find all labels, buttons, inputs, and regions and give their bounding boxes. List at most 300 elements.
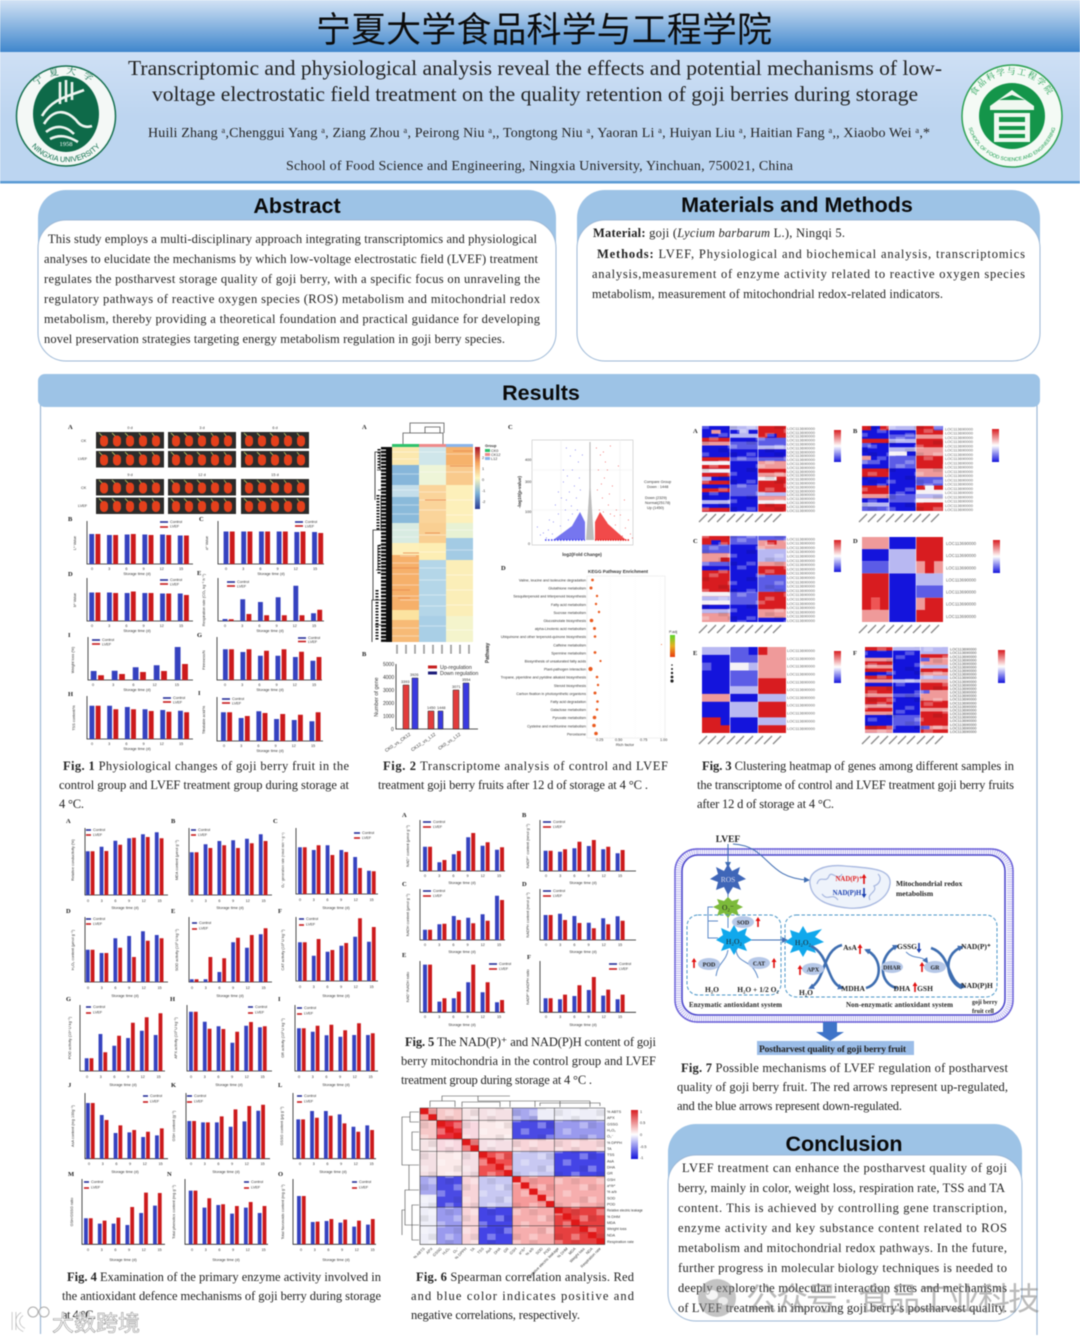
chart M: GSH/GSSG: 0 3 6 9 12 15 <box>87 1248 162 1252</box>
chart: respiration rate: Control <box>237 580 249 584</box>
KEGG pathway enrichment dot plot: Galactose metabolism <box>550 708 586 712</box>
correlation matrix: Weight loss <box>607 1227 627 1231</box>
heatmap E: E <box>693 650 697 657</box>
correlation matrix: TA <box>607 1147 612 1151</box>
heatmap B: LOC113690000 <box>945 443 974 448</box>
correlation matrix: MDA <box>568 1247 577 1256</box>
enzyme ovals: DHAR <box>883 966 901 972</box>
logo: Ningxia University <box>15 64 117 168</box>
photos of goji berries: 3 d <box>199 426 205 430</box>
metabolite labels: H₂O + 1/2 O₂ <box>737 985 779 994</box>
heatmap F: LOC113690000 <box>950 680 977 684</box>
heatmap C: LOC113690000 <box>787 554 816 558</box>
chart F: NADP+/NADPH: 0 3 6 9 12 15 <box>545 1015 622 1019</box>
heatmap C: LOC113690000 <box>787 618 816 623</box>
conclusion text: LVEF treatment can enhance the postharvest quality of goji <box>682 1161 1008 1175</box>
KEGG pathway enrichment dot plot: Glutathione metabolism <box>548 587 586 591</box>
heatmap A: LOC113690000 <box>787 473 816 478</box>
mitochondrion <box>810 866 890 908</box>
methods text: Methods: LVEF, Physiological and biochemical analysis, transcriptomics <box>597 247 1025 261</box>
affiliation: School of Food Science and Engineering, Ningxia University, Yinchuan, 750021, China <box>286 159 794 174</box>
chart B: NADP+: Control <box>553 820 565 824</box>
caption: figure 2: treatment goji berry fruits after 12 d of storage at 4 °C . <box>378 778 648 792</box>
correlation matrix: POD <box>607 1202 615 1206</box>
heatmap C: LOC113690000 <box>787 592 816 597</box>
chart A: relative conductivity: LVEF <box>93 833 103 837</box>
chart L: GSSG: GSSG content (μg g⁻¹) <box>280 1106 284 1145</box>
caption: figure 1: control group and LVEF treatment group during storage at <box>59 778 350 792</box>
heatmap F: LOC113690000 <box>950 676 977 680</box>
abstract text: regulates the postharvest storage quality of goji berry, with a specific focus on unraveling the <box>44 272 540 286</box>
bar chart: differentially expressed genes: 0 <box>391 727 394 733</box>
metabolite labels: GSSG <box>897 942 917 951</box>
heatmap C: LOC113690000 <box>787 605 816 610</box>
chart: b* value: Storage time (d) <box>123 629 151 633</box>
chart C: superoxide generation: O₂⁻ generation rate (nmol min⁻¹ g⁻¹) <box>281 832 285 888</box>
mitochondrion: NAD(P)⁺ <box>836 876 863 883</box>
clustered heatmap: A <box>362 424 367 431</box>
chart I: GR: LVEF <box>304 1012 314 1016</box>
chart: b* value <box>68 571 193 633</box>
chart B: NADP+ <box>522 812 636 885</box>
chart H: APX: APX activity (10³ U kg⁻¹) <box>174 1017 178 1059</box>
correlation matrix: NDA <box>585 1247 594 1255</box>
heatmap A: LOC113690000 <box>787 508 816 513</box>
chart: TSS: TSS content/% <box>72 705 76 731</box>
heatmap B: LOC113690000 <box>945 473 974 478</box>
chart I: GR: I <box>278 996 281 1003</box>
bar chart: differentially expressed genes: Down regulation <box>440 671 478 677</box>
correlation matrix: a*/b* <box>518 1247 527 1256</box>
heatmap F <box>853 647 1005 744</box>
chart: TSS: LVEF <box>173 700 183 704</box>
metabolite labels <box>705 942 993 997</box>
heatmap C: LOC113690000 <box>787 614 816 619</box>
conclusion text: berry, mainly in color, weight loss, respiration rate, TSS and TA <box>678 1181 1005 1195</box>
chart B: NADP+: NADP⁺ content (nmol g⁻¹) <box>526 823 530 868</box>
methods text: Material: goji (Lycium barbarum L.), Ningqi 5. <box>593 226 845 240</box>
caption: figure 3: after 12 d of storage at 4 °C. <box>697 797 834 811</box>
chart G: POD: LVEF <box>93 1010 103 1014</box>
heatmap A: LOC113690000 <box>787 484 816 489</box>
correlation matrix: TSS <box>607 1153 615 1157</box>
chart: firmness: Storage time (d) <box>256 688 284 692</box>
heatmap F: LOC113690000 <box>950 666 977 670</box>
chart F: NADP+/NADPH: Control <box>619 962 631 966</box>
heatmap E: LOC113690000 <box>787 671 816 676</box>
KEGG pathway enrichment dot plot: Steroid biosynthesis <box>554 684 586 688</box>
chart: firmness: 0 3 6 9 12 15 <box>224 683 316 687</box>
red up-regulation arrows <box>692 874 924 992</box>
chart M: GSH/GSSG: M <box>68 1171 74 1178</box>
caption: figure 5: berry mitochondria in the control group and LVEF <box>401 1054 656 1068</box>
caption: figure 6: Fig. 6 Spearman correlation analysis. Red <box>416 1270 635 1284</box>
chart N: total phenolics: LVEF <box>251 1186 261 1190</box>
abstract text: analyses to elucidate the mechanisms by which low-voltage electrostatic field (LVEF) treatment <box>44 252 539 266</box>
LVEF input and arrows <box>708 835 808 940</box>
photos of goji berries: CK <box>81 486 87 490</box>
heatmap C: LOC113690000 <box>787 549 816 554</box>
correlation matrix: APX <box>425 1247 434 1255</box>
chart: a* value: C <box>199 516 204 523</box>
chart H: APX: LVEF <box>255 1010 265 1014</box>
heatmap D: LOC113690000 <box>946 565 977 570</box>
chart F: NADP+/NADPH <box>526 954 636 1027</box>
chart D: hydrogen peroxide: 0 3 6 9 12 15 <box>87 986 162 990</box>
heatmap E: LOC113690000 <box>787 718 816 723</box>
logo: School of Food Science: SCHOOL OF FOOD SCIENCE AND ENGINEERING <box>968 126 1056 162</box>
chart: L* value: L* Value <box>73 536 77 550</box>
volcano plot: 0 <box>528 542 530 546</box>
chart J: AsA <box>68 1082 168 1174</box>
chart H: APX: 0 3 6 9 12 15 <box>190 1075 265 1079</box>
correlation matrix: 0.5 <box>640 1121 645 1125</box>
heatmap B: LOC113690000 <box>945 448 974 452</box>
KEGG pathway enrichment dot plot: Tropane, piperidine and pyridine alkaloid biosynthesis <box>501 676 586 680</box>
chart: b* value: Control <box>170 578 182 582</box>
chart B: NADP+: 0 3 6 9 12 15 <box>545 874 622 878</box>
chart: TSS: Control <box>173 696 185 700</box>
figure 5: NAD(P) content <box>401 812 657 1087</box>
chart C: NADH: 0 3 6 9 12 15 <box>424 943 501 947</box>
chart: a* value: 0 3 6 9 12 15 <box>225 567 317 571</box>
conclusion text: deeply explore the molecular interaction sites and mechanisms <box>678 1281 1007 1295</box>
chart C: superoxide generation: 0 3 6 9 12 15 <box>299 898 374 902</box>
photos of goji berries <box>68 424 309 514</box>
bar chart: differentially expressed genes: 3071 <box>452 685 460 689</box>
heatmap A: LOC113690000 <box>787 457 816 462</box>
logo: Ningxia University: 宁夏大学 <box>32 66 94 85</box>
chart N: total phenolics: Total phenolics content (mg g⁻¹) <box>172 1184 176 1239</box>
chart A: relative conductivity: Storage time (d) <box>111 906 139 910</box>
heatmap E: LOC113690000 <box>787 648 816 653</box>
metabolite labels: MDHA <box>841 984 865 993</box>
heatmap E: LOC113690000 <box>787 711 816 716</box>
quality box <box>757 1041 914 1055</box>
KEGG pathway enrichment dot plot: Spermine metabolism <box>551 651 586 655</box>
chart I: GR <box>278 996 378 1087</box>
chart A: NAD+: NAD⁺ content (μmol g⁻¹) <box>406 824 410 867</box>
conclusion text: of LVEF treatment in improving goji berry's postharvest quality. <box>678 1301 1007 1315</box>
chart C: NADH: Storage time (d) <box>448 950 476 954</box>
bar chart: differentially expressed genes: 4000 <box>383 675 394 681</box>
heatmap A: LOC113690000 <box>787 449 816 454</box>
chart E: SOD: LVEF <box>199 926 209 930</box>
logo: School of Food Science <box>960 64 1064 168</box>
chart F: NADP+/NADPH: F <box>527 954 531 961</box>
panel: abstract <box>38 190 556 361</box>
metabolite labels: H₂O <box>705 985 719 994</box>
chart A: relative conductivity: A <box>66 818 71 825</box>
heatmap C: LOC113690000 <box>787 609 816 614</box>
bar chart: differentially expressed genes: Number of gene <box>374 677 380 717</box>
chart: titratable acid: I <box>198 690 201 697</box>
photos of goji berries: 6 d <box>272 426 278 430</box>
heatmap F: LOC113690000 <box>950 705 977 709</box>
chart: L* value: Control <box>170 520 182 524</box>
chart: respiration rate: Respiration rate (CO₂ kg⁻¹ h⁻¹) <box>202 573 206 626</box>
chart E: NAD+/NADH: Control <box>499 962 511 966</box>
metabolite labels: AsA <box>843 943 857 952</box>
bar chart: differentially expressed genes: 3000 <box>383 688 394 694</box>
chart O: total flavonoids <box>278 1171 376 1262</box>
bar chart: differentially expressed genes: Up-regulation <box>440 665 472 671</box>
chart F: CAT: LVEF <box>306 922 316 926</box>
methods text: analysis,measurement of enzyme activity related to reactive oxygen species <box>592 267 1025 281</box>
correlation matrix: -1 <box>640 1156 643 1160</box>
clustered heatmap: 0 <box>482 478 484 482</box>
abstract text <box>44 232 541 346</box>
chart L: GSSG <box>278 1082 376 1174</box>
chart M: GSH/GSSG: GSH/GSSG ratio <box>70 1198 74 1226</box>
heatmap A: LOC113690000 <box>787 496 816 501</box>
chart J: AsA: 0 3 6 9 12 15 <box>88 1162 163 1166</box>
chart: titratable acid: Titratable acid/% <box>202 705 206 734</box>
correlation matrix: POD <box>543 1247 552 1256</box>
chart F: NADP+/NADPH: LVEF <box>619 967 629 971</box>
clustered heatmap: -2 <box>482 500 485 504</box>
heatmap F: LOC113690000 <box>950 655 977 659</box>
chart L: GSSG: 0 3 6 9 12 15 <box>299 1162 374 1166</box>
chart A: NAD+: A <box>402 812 407 819</box>
methods text <box>592 226 1025 301</box>
correlation matrix: H₂O₂ <box>607 1128 616 1132</box>
volcano plot: C <box>508 424 513 431</box>
quality box: Postharvest quality of goji berry fruit <box>759 1045 907 1055</box>
chart G: POD: POD activity (10⁴ U kg⁻¹) <box>68 1016 72 1059</box>
cell wall <box>675 849 1013 1022</box>
system labels: fruit cell <box>972 1009 994 1015</box>
caption: figure 2 <box>378 759 668 792</box>
metabolite labels: GSH <box>917 984 933 993</box>
panel: conclusion <box>668 1124 1022 1321</box>
correlation matrix: NDA <box>607 1234 615 1238</box>
chart: TSS: Storage time (d) <box>123 747 151 751</box>
heatmap B: LOC113690000 <box>945 477 974 482</box>
heatmap F: LOC113690000 <box>950 712 977 716</box>
chart D: hydrogen peroxide: LVEF <box>93 922 103 926</box>
system labels: Enzymatic antioxidant system <box>689 1001 782 1009</box>
chart E: SOD: E <box>171 908 175 915</box>
heatmap E: LOC113690000 <box>787 656 816 661</box>
KEGG pathway enrichment dot plot <box>485 565 677 747</box>
chart K: GSH: LVEF <box>194 1100 204 1104</box>
heatmap C: LOC113690000 <box>787 575 816 580</box>
KEGG pathway enrichment dot plot: Rich factor <box>616 743 635 747</box>
poster title: voltage electrostatic field treatment on the quality retention of goji berries during storage <box>152 82 918 106</box>
chart E: NAD+/NADH: 0 3 6 9 12 15 <box>424 1015 501 1019</box>
chart D: NADPH: Storage time (d) <box>569 950 597 954</box>
heatmap A: LOC113690000 <box>787 480 816 486</box>
correlation matrix: % a/b <box>525 1247 535 1257</box>
chart L: GSSG: LVEF <box>304 1100 314 1104</box>
clustered heatmap <box>362 423 500 654</box>
chart B: NADP+: B <box>522 812 527 819</box>
heatmap F: LOC113690000 <box>950 648 977 652</box>
heatmap F: LOC113690000 <box>950 687 977 691</box>
heatmap D: LOC113690000 <box>946 553 977 558</box>
correlation matrix: % a/b <box>607 1190 617 1194</box>
caption: figure 1: 4 °C. <box>59 797 84 811</box>
chart K: GSH: Storage time (d) <box>212 1170 240 1174</box>
heatmap A: A <box>693 428 698 435</box>
logo: Ningxia University: NINGXIA UNIVERSITY <box>32 142 100 163</box>
mitochondrial redox label <box>896 879 963 898</box>
heatmap C: LOC113690000 <box>787 596 816 602</box>
heatmap E: LOC113690000 <box>787 679 816 684</box>
heatmap E: LOC113690000 <box>787 664 816 669</box>
conclusion text: content. This is achieved by controlling gene transcription, <box>678 1201 1007 1215</box>
heatmap C: LOC113690000 <box>787 562 816 567</box>
chart N: total phenolics: N <box>167 1171 172 1178</box>
heatmap A: LOC113690000 <box>787 500 816 505</box>
abstract text: novel preservation strategies targeting energy metabolism regulation in goji berry species. <box>44 332 505 346</box>
chart J: AsA: Control <box>150 1094 162 1098</box>
chart A: relative conductivity: 0 3 6 9 12 15 <box>87 899 162 903</box>
chart M: GSH/GSSG: LVEF <box>91 1186 101 1190</box>
chart: a* value: LVEF <box>305 524 315 528</box>
caption: figure 3: the transcriptome of control and LVEF treatment goji berry fruits <box>697 778 1014 792</box>
system labels: goji berry <box>972 1000 998 1006</box>
enzyme ovals: CAT <box>753 962 765 968</box>
clustered heatmap: -1 <box>482 489 485 493</box>
system labels <box>689 1000 998 1015</box>
enzyme ovals: APX <box>807 968 820 974</box>
chart J: AsA: Storage time (d) <box>111 1170 139 1174</box>
caption: figure 5: treatment group during storage at 4 °C . <box>401 1073 592 1087</box>
heading: abstract: Abstract <box>253 194 341 218</box>
caption: figure 7 <box>677 1061 1009 1113</box>
heatmap A: LOC113690000 <box>787 461 816 466</box>
KEGG pathway enrichment dot plot: 0.75 <box>640 738 647 742</box>
chart C: NADH <box>402 881 505 954</box>
chart K: GSH: 0 3 6 9 12 15 <box>190 1162 265 1166</box>
volcano plot: -log10(p-value) <box>517 476 522 508</box>
heatmap F: LOC113690000 <box>950 691 977 695</box>
chart C: NADH: NADH content (μmol g⁻¹) <box>406 893 410 936</box>
chart G: POD: 0 3 6 9 12 15 <box>86 1075 161 1079</box>
heatmap B: LOC113690000 <box>945 464 974 470</box>
chart: a* value: Storage time (d) <box>257 572 285 576</box>
system labels: Non-enzymatic antioxidant system <box>846 1001 953 1009</box>
conclusion text: metabolism and mitochondrial redox pathways. In the future, <box>678 1241 1007 1255</box>
chart B: MDA: B <box>171 818 176 825</box>
enzyme ovals: GR <box>930 966 940 972</box>
chart I: GR: Control <box>304 1006 316 1010</box>
bar chart: differentially expressed genes: 3393 <box>401 680 409 684</box>
chart: L* value: Storage time (d) <box>123 572 151 576</box>
heatmap D: LOC113690000 <box>946 614 977 619</box>
institution title: 宁夏大学食品科学与工程学院 <box>316 11 772 50</box>
ROS burst <box>710 864 746 895</box>
volcano plot: Compare Group <box>644 480 671 484</box>
caption: figure 6: and blue color indicates positive and <box>411 1289 635 1303</box>
chart C: superoxide generation: C <box>273 818 278 825</box>
correlation matrix: % ABTS <box>413 1247 426 1260</box>
chart O: total flavonoids: Total flavonoids content (mg g⁻¹) <box>281 1184 285 1239</box>
KEGG pathway enrichment dot plot: Glucosinolate biosynthesis <box>543 619 586 623</box>
chart A: relative conductivity: Control <box>93 828 105 832</box>
heatmap F: LOC113690000 <box>950 726 977 730</box>
correlation matrix: Respiration rate <box>580 1247 602 1269</box>
heatmap A: LOC113690000 <box>787 453 816 458</box>
chart I: GR: 0 3 6 9 12 15 <box>298 1075 373 1079</box>
chart O: total flavonoids: Control <box>359 1180 371 1184</box>
heatmap D: D <box>853 538 858 545</box>
correlation matrix: a*/b* <box>607 1184 616 1188</box>
heatmap A: LOC113690000 <box>787 430 816 435</box>
KEGG pathway enrichment dot plot: alpha-Linolenic acid metabolism <box>535 627 586 631</box>
chart E: NAD+/NADH <box>402 952 511 1027</box>
chart: a* value: a* Value <box>205 536 209 550</box>
chart J: AsA: LVEF <box>150 1100 160 1104</box>
heatmap B: LOC113690000 <box>945 490 974 495</box>
chart: titratable acid: Control <box>232 697 244 701</box>
chart E: NAD+/NADH: LVEF <box>499 967 509 971</box>
chart: titratable acid <box>198 690 323 753</box>
KEGG pathway enrichment dot plot: Pyruvate metabolism <box>552 716 586 720</box>
poster title: Transcriptomic and physiological analysis reveal the effects and potential mechanisms of low- <box>128 56 942 80</box>
header banner <box>0 0 1080 184</box>
chart: weight loss: 0 3 6 12 15 <box>92 683 179 687</box>
heatmap C: LOC113690000 <box>787 545 816 550</box>
correlation matrix: DHA <box>607 1166 615 1170</box>
correlation matrix: SOD <box>607 1196 615 1200</box>
heading: results: Results <box>502 381 580 405</box>
heatmap D <box>853 537 1000 633</box>
photos of goji berries: 9 d <box>127 473 133 477</box>
chart: firmness: Firmness/N <box>202 650 206 670</box>
chart B: MDA: MDA content (μmol g⁻¹) <box>175 839 179 880</box>
chart: weight loss: Control <box>102 638 114 642</box>
heatmap A: LOC113690000 <box>787 434 816 439</box>
chart I: GR: GR activity (10³ U kg⁻¹) <box>281 1017 285 1058</box>
chart H: APX: Storage time (d) <box>215 1083 243 1087</box>
clustered heatmap: CK12 <box>491 453 500 457</box>
heatmap A: LOC113690000 <box>787 504 816 509</box>
KEGG pathway enrichment dot plot: D <box>501 565 506 572</box>
chart L: GSSG: Control <box>304 1094 316 1098</box>
chart: TSS <box>68 691 193 751</box>
heatmap A: LOC113690000 <box>787 469 816 474</box>
volcano plot: 400 <box>525 458 531 462</box>
superoxide burst <box>713 897 743 918</box>
chart: L* value: LVEF <box>170 525 180 529</box>
photos of goji berries: CK <box>81 439 87 443</box>
correlation matrix: APX <box>607 1116 615 1120</box>
chart B: MDA: Storage time (d) <box>216 906 244 910</box>
correlation matrix: H₂O₂ <box>442 1247 451 1256</box>
chart C: NADH: C <box>402 881 407 888</box>
chart: weight loss <box>68 632 193 692</box>
chart: weight loss: Storage time (d) <box>123 688 151 692</box>
heatmap C: LOC113690000 <box>787 558 816 563</box>
heatmap C: LOC113690000 <box>787 536 816 541</box>
chart: a* value: Control <box>305 520 317 524</box>
chart A: NAD+: Control <box>433 820 445 824</box>
conclusion text: enzyme activity and key substance content related to ROS <box>678 1221 1007 1235</box>
chart E: SOD <box>171 908 272 998</box>
downward arrow <box>816 1022 844 1041</box>
metabolite labels: H₂O <box>799 988 813 997</box>
chart D: hydrogen peroxide: Control <box>93 917 105 921</box>
chart F: CAT: Control <box>306 917 318 921</box>
correlation matrix: TSS <box>477 1247 485 1255</box>
heatmap C: LOC113690000 <box>787 601 816 606</box>
caption: figure 6 <box>411 1270 635 1322</box>
chart G: POD: G <box>66 996 71 1003</box>
panel: materials and methods <box>577 190 1040 361</box>
